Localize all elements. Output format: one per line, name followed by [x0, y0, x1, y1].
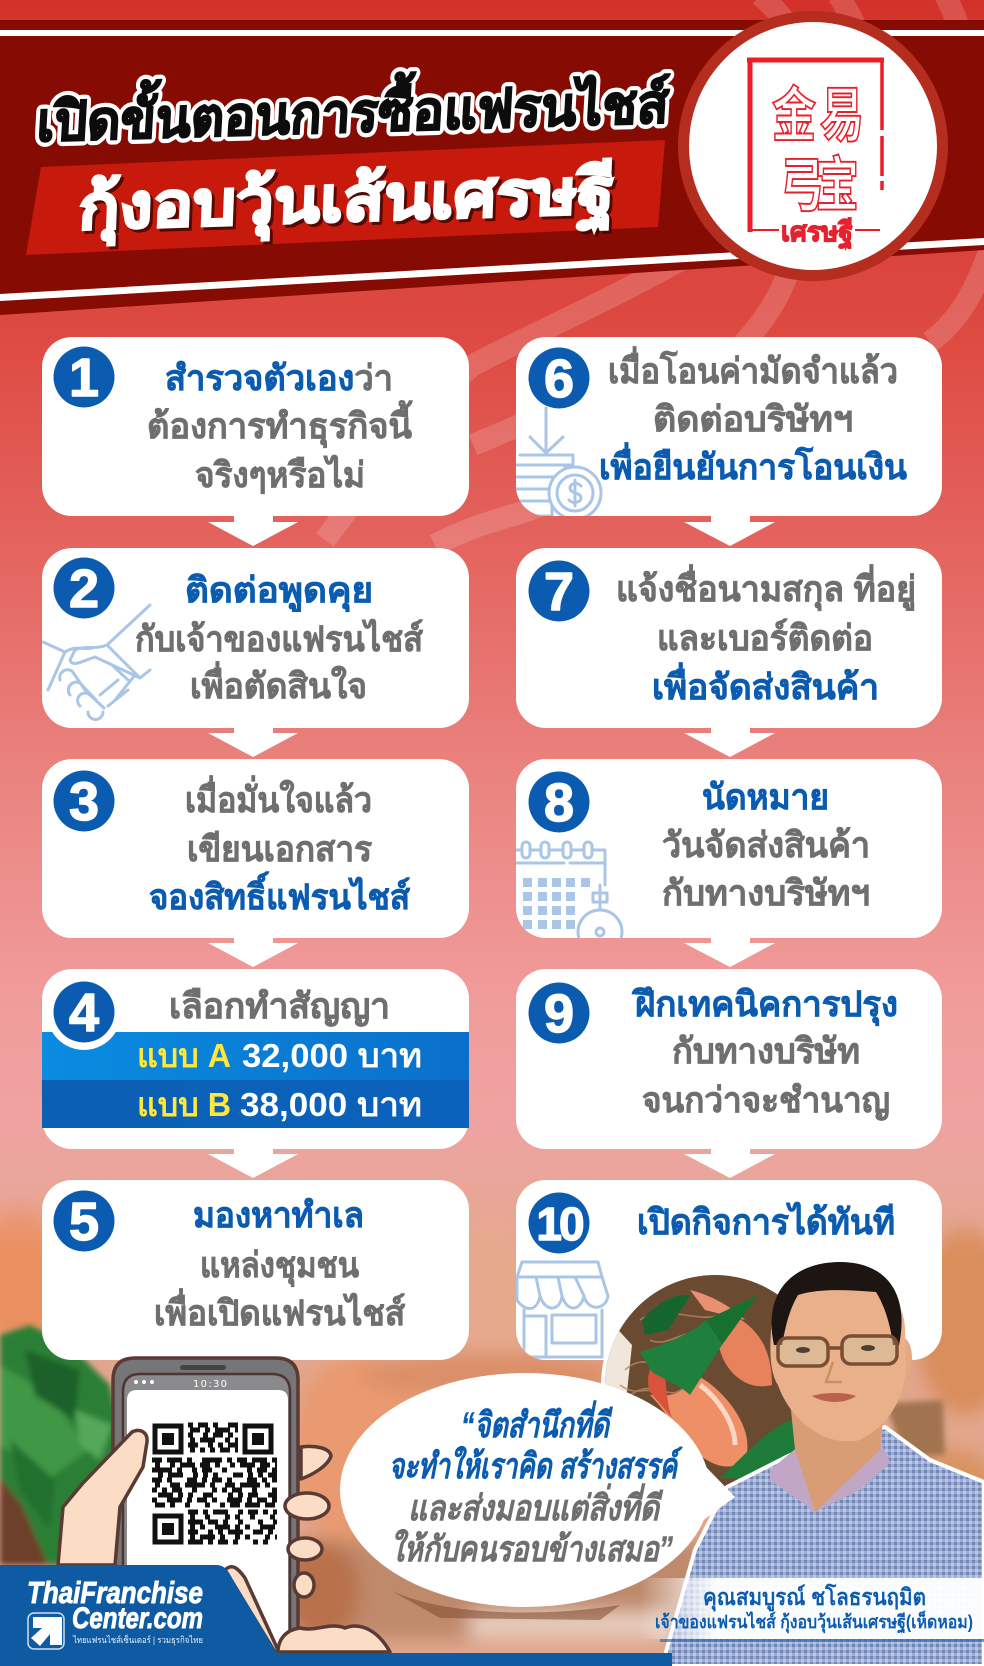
title line 1: เปิดขั้นตอนการซื้อแฟรนไชส์: [35, 64, 671, 153]
logo panel: Center.com: [72, 1602, 203, 1635]
logo wordmark: ThaiFranchise: [27, 1575, 203, 1610]
hand: [58, 1430, 390, 1652]
white top stripe: [0, 30, 984, 36]
arrows between cards: [208, 510, 775, 1178]
icon: storefront: [517, 1262, 608, 1357]
quote blue lines: “จิตสำนึกที่ดี: [461, 1400, 613, 1445]
seal frame: [747, 58, 884, 232]
plan A: แบบ A: [137, 1037, 231, 1074]
step 3 card: จองสิทธิ์แฟรนไชส์: [149, 871, 411, 917]
step 2 card: 2: [69, 559, 99, 619]
speech bubble: จะทำให้เราคิด สร้างสรรค์: [389, 1446, 683, 1486]
owner name: คุณสมบูรณ์ ชโลธรนฤมิต: [703, 1583, 926, 1612]
step 7 card: [516, 548, 942, 728]
owner portrait: [662, 1262, 984, 1666]
seal label: เศรษฐี: [781, 217, 853, 250]
step 4 card: 38,000 บาท: [240, 1086, 422, 1123]
step 3 card: เมื่อมั่นใจแล้ว: [185, 775, 372, 820]
hair: [772, 1262, 902, 1345]
speech bubble: [340, 1373, 735, 1620]
herbs: [640, 1320, 722, 1395]
step 1 card: สำรวจตัวเองว่า: [165, 359, 393, 398]
price bars: [42, 976, 469, 1128]
shirt: [662, 1427, 984, 1666]
shrimp: [650, 1375, 747, 1467]
bottom blue strip: [0, 1653, 672, 1666]
step 7 card: แจ้งชื่อนามสกุล ที่อยู่: [616, 564, 916, 611]
background food photo: [0, 1179, 984, 1653]
step 5 card: 5: [69, 1192, 99, 1252]
title line 2: กุ้งอบวุ้นเส้นเศรษฐี: [77, 157, 616, 248]
step 8 card: นัดหมาย: [702, 778, 829, 817]
header band: [0, 20, 984, 315]
white bottom stripe: [0, 238, 984, 301]
step 6 card: เพื่อยืนยันการโอนเงิน: [599, 442, 907, 487]
step 3 card: [42, 759, 469, 938]
ear: [894, 1338, 912, 1378]
step 2 card: เพื่อตัดสินใจ: [190, 661, 367, 706]
seal characters: [772, 68, 864, 224]
title line 1: เปิดขั้นตอนการซื้อแฟรนไชส์: [35, 64, 671, 153]
icon: calendar and stopwatch: [516, 840, 624, 938]
step 6 card: [516, 337, 942, 519]
nose: [826, 1362, 842, 1382]
step 4 card: 4: [69, 983, 99, 1043]
step 3 card: 3: [69, 772, 99, 832]
step 8 card: [516, 759, 942, 954]
step 7 card: และเบอร์ติดต่อ: [657, 618, 873, 658]
logo seal: [678, 11, 948, 281]
mouth: [812, 1393, 856, 1402]
step 1 card: จริงๆหรือไม่: [195, 454, 365, 495]
noodles: [620, 1313, 716, 1394]
seal characters: 易: [820, 68, 864, 154]
status bar dots: [134, 1380, 154, 1384]
step 8 card: วันจัดส่งสินค้า: [662, 826, 870, 865]
logo arrow icon: [28, 1613, 64, 1649]
step 10 card: 10: [536, 1198, 583, 1250]
step 2 card: [42, 548, 469, 728]
step 1 card: ต้องการทำธุรกิจนี้: [147, 400, 413, 448]
collar: [770, 1440, 890, 1512]
seal characters: 宝: [815, 138, 859, 224]
step 5 card: มองหาทำเล: [193, 1196, 364, 1235]
step 9 card: จนกว่าจะชำนาญ: [642, 1081, 890, 1121]
phone with QR code: [58, 1358, 390, 1660]
title line 2: กุ้งอบวุ้นเส้นเศรษฐี: [80, 160, 619, 251]
step 10 card: เปิดกิจการได้ทันที: [637, 1201, 895, 1242]
icon: handshake: [43, 605, 150, 720]
step 9 card: [516, 969, 942, 1149]
step 6 card: 6: [544, 349, 574, 409]
background arc stripes: [325, 0, 984, 545]
step 5 card: [42, 1180, 469, 1360]
face: [770, 1270, 906, 1441]
phone body: [113, 1358, 298, 1660]
eyes: [796, 1345, 875, 1353]
QR code: [152, 1425, 277, 1542]
step 2 card: ติดต่อพูดคุย: [185, 571, 373, 612]
step 4 card: เลือกทำสัญญา: [169, 987, 390, 1027]
quote gray lines: และส่งมอบแต่สิ่งที่ดี: [408, 1483, 663, 1528]
neck: [790, 1400, 885, 1512]
food photo circle: [601, 1275, 795, 1486]
icon: coins: [516, 408, 601, 519]
step 4 card: 32,000 บาท: [242, 1037, 422, 1074]
step 3 card: เขียนเอกสาร: [187, 830, 372, 869]
glasses: [778, 1336, 897, 1366]
step 9 card: 9: [544, 984, 574, 1044]
step 8 card: 8: [544, 773, 574, 833]
step 9 card: กับทางบริษัท: [672, 1032, 860, 1071]
step 5 card: แหล่งชุมชน: [200, 1246, 359, 1287]
step 8 card: กับทางบริษัทฯ: [662, 874, 870, 913]
speech bubble: ให้กับคนรอบข้างเสมอ”: [390, 1529, 673, 1569]
title line 2 banner: [26, 140, 665, 255]
step 10 card: [516, 1180, 942, 1360]
logo panel: [0, 1565, 277, 1653]
step 7 card: เพื่อจัดส่งสินค้า: [652, 662, 879, 707]
plan B: แบบ B: [137, 1086, 231, 1123]
step 9 card: ฝึกเทคนิคการปรุง: [632, 985, 898, 1026]
phone screen: [127, 1390, 288, 1653]
seal characters: 弓: [780, 138, 824, 224]
step 7 card: 7: [544, 562, 574, 622]
maroon banner: [0, 20, 984, 315]
step 2 card: กับเจ้าของแฟรนไชส์: [135, 618, 424, 659]
seal characters: 金: [772, 68, 816, 154]
step 1 card: 1: [69, 348, 99, 408]
step 1 card: [42, 337, 469, 516]
status bar text: 10:30: [193, 1379, 227, 1390]
step 6 card: ติดต่อบริษัทฯ: [653, 400, 853, 439]
step 6 card: เมื่อโอนค่ามัดจำแล้ว: [608, 346, 898, 391]
owner name panel: [640, 1578, 984, 1642]
step 5 card: เพื่อเปิดแฟรนไชส์: [154, 1288, 406, 1333]
step 4 card: [42, 969, 469, 1149]
logo tagline: ไทยแฟรนไชส์เซ็นเตอร์ | รวมธุรกิจไทย: [72, 1633, 203, 1646]
